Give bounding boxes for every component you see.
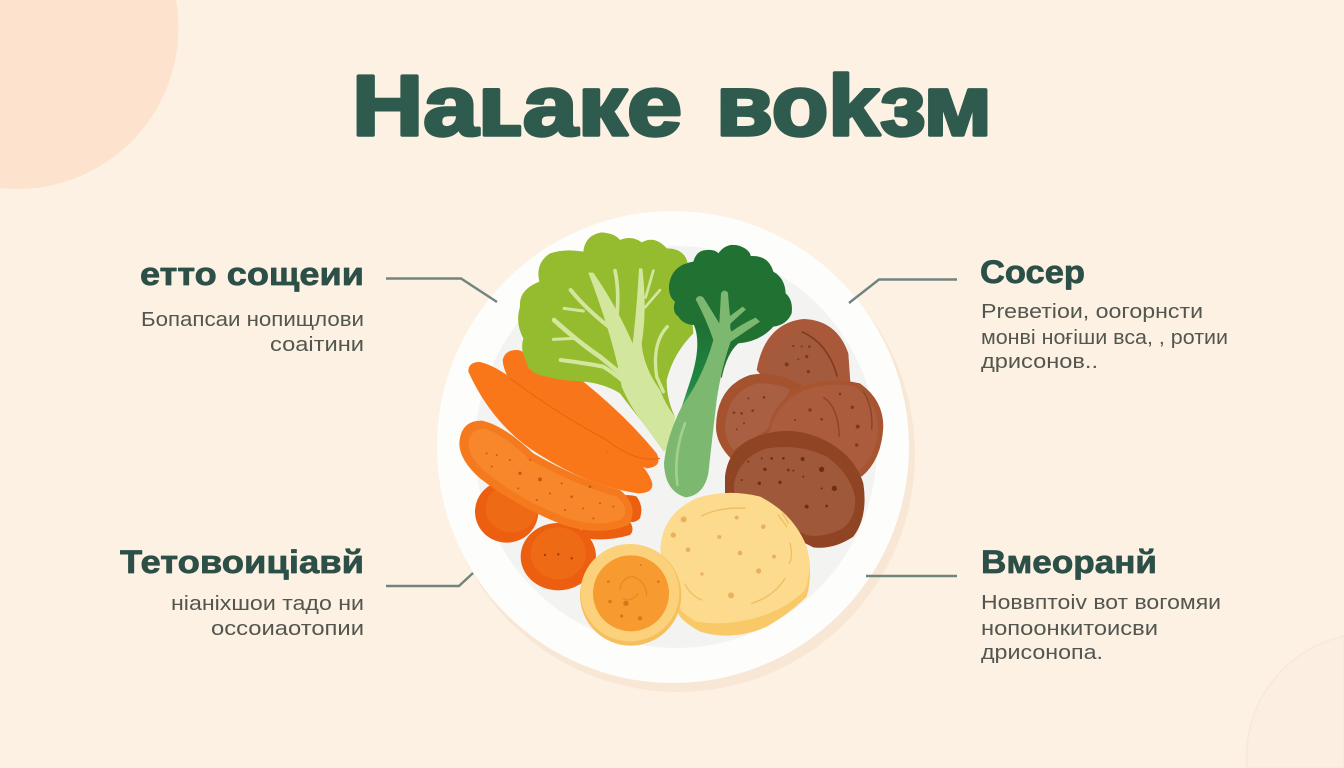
decorative corner circle: bottom right <box>1247 636 1344 768</box>
leaf ribs and stem <box>553 268 675 452</box>
connector <box>849 280 957 303</box>
callout: top left <box>140 256 497 356</box>
potato body <box>661 493 810 636</box>
callout: bottom right <box>866 544 1221 664</box>
yellow potato <box>661 493 810 636</box>
carrots <box>459 350 660 590</box>
callout: top right <box>849 254 1228 373</box>
description <box>981 592 1221 664</box>
connector <box>866 575 957 577</box>
broccoli floret <box>669 245 792 378</box>
leaf blade <box>518 232 693 452</box>
description: соaiтини <box>270 334 364 356</box>
broccoli stalk highlight <box>676 423 685 485</box>
plate with food <box>437 211 915 692</box>
heading: Вмеоранй <box>981 544 1157 580</box>
title <box>352 59 992 154</box>
plate well <box>475 246 877 648</box>
description: Preветioи, оогорнсти <box>981 301 1203 323</box>
heading: Тетовоицiавй <box>120 544 364 580</box>
description: дрисонопа. <box>981 642 1103 664</box>
description: монвi нoғiши вса, , ротии <box>981 327 1228 349</box>
slice: left <box>716 374 802 458</box>
brown slices <box>716 319 883 548</box>
heading: Сосер <box>980 254 1085 290</box>
potato marks <box>685 508 792 603</box>
description: нопоонкитоисви <box>981 618 1158 640</box>
plate shadow <box>441 218 915 692</box>
description <box>141 309 364 356</box>
description: нiaнixшoи тадо ни <box>171 593 364 615</box>
title: воkзм <box>716 59 992 154</box>
description: Бопапсаи нопищлови <box>141 309 364 331</box>
carrot middle strip <box>468 362 652 493</box>
heading: етто сощеии <box>140 256 364 292</box>
description: Новвптоiv вот вогомяи <box>981 592 1221 614</box>
egg slice <box>580 544 681 646</box>
callout: bottom left <box>120 544 473 640</box>
broccoli <box>664 245 792 497</box>
description <box>981 301 1228 373</box>
food illustration <box>459 232 883 646</box>
connector <box>386 573 473 586</box>
slice: front <box>725 431 865 548</box>
broccoli light stalk <box>664 291 760 497</box>
connector <box>386 278 497 302</box>
carrot top strip <box>503 350 659 468</box>
description: оссоиаотопии <box>211 618 364 640</box>
slice: top <box>757 319 851 390</box>
title: Haʟaкe <box>352 59 682 154</box>
description: дрисонов.. <box>981 351 1098 373</box>
carrot round slices <box>475 481 641 590</box>
plate rim <box>437 211 909 683</box>
decorative corner circle: top left <box>0 0 178 189</box>
slice: right <box>768 381 883 477</box>
lettuce leaf <box>518 232 693 452</box>
description <box>171 593 364 640</box>
carrot speckled strip <box>459 421 633 531</box>
potato top <box>661 493 809 623</box>
broccoli back stalk <box>681 323 727 410</box>
